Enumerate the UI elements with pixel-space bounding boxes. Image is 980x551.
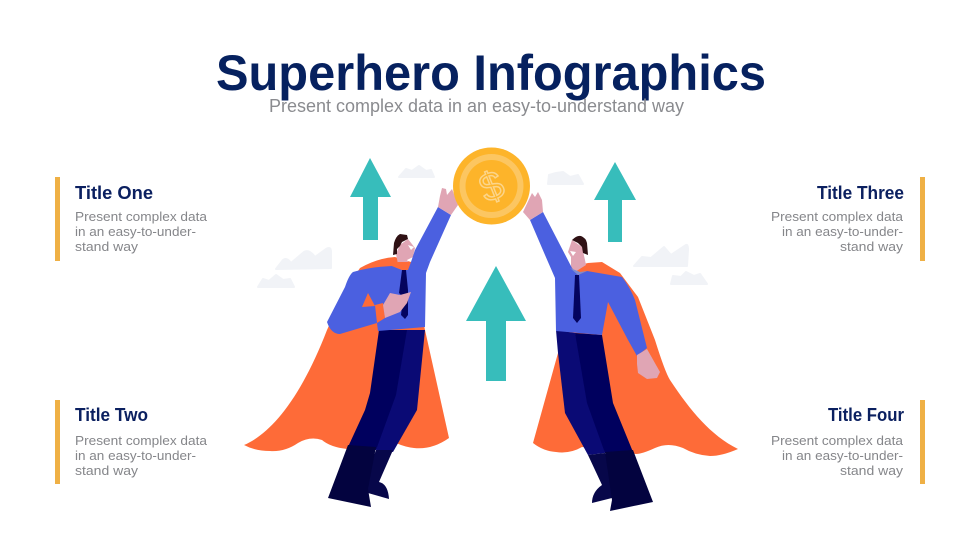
panel: title one: Title One [75,183,153,203]
panel: title four: in an easy-to-under- [782,448,903,463]
subtitle: Present complex data in an easy-to-understand way [269,96,684,116]
left cape collar [392,262,411,270]
right collar [570,268,587,275]
right raised hand [523,192,543,220]
left torso and arm [327,207,451,334]
panel: title three: Title Three [817,183,904,203]
right trousers: back leg [556,330,605,455]
left smile [408,245,414,250]
left tie [399,270,408,319]
panel: title two: in an easy-to-under- [75,448,196,463]
icon: gold coin [453,148,530,224]
left hero [244,188,458,507]
arrow: centre [466,266,526,381]
arrow: left [350,158,391,240]
panel: title three: in an easy-to-under- [782,224,903,239]
panel: title one [55,177,208,261]
right front boot [605,450,653,511]
left front boot [328,445,376,507]
left cuff [375,303,385,323]
arrow: right [594,162,636,242]
panel: title one: Present complex data [75,209,208,224]
left trousers: back leg [376,330,425,452]
right tie [573,275,581,323]
right lowered hand [637,349,660,379]
right neck and face [568,240,586,272]
left chest hand [383,292,411,318]
panel: title three: Present complex data [771,209,904,224]
panel: title one: in an easy-to-under- [75,224,196,239]
background clouds [258,166,707,287]
right hair [572,236,588,255]
panel: title four: stand way [840,463,904,478]
right cape [533,262,738,456]
left cape [244,257,449,451]
panel: title two [55,400,208,484]
panel: title one: stand way [75,239,139,254]
panel: title four [771,400,925,484]
left neck and face [396,239,415,268]
left hair [393,234,408,255]
panel: title two: stand way [75,463,139,478]
left raised hand [438,188,458,215]
icon: gold coin: $ [473,162,510,211]
panel: title two: Present complex data [75,433,208,448]
panel: title four: Present complex data [771,433,904,448]
panel: title four: Title Four [828,405,904,425]
left trousers: front leg [348,330,407,450]
right hero [523,192,738,511]
left back boot [363,450,393,499]
panel: title two: Title Two [75,405,148,425]
panel: title three: stand way [840,239,904,254]
right trousers: front leg [575,333,633,453]
right back boot [588,453,618,503]
right torso and arm [530,212,647,356]
title: Superhero Infographics [216,45,766,101]
right smile [570,251,576,256]
left cape fold [362,293,375,307]
panel: title three [771,177,925,261]
